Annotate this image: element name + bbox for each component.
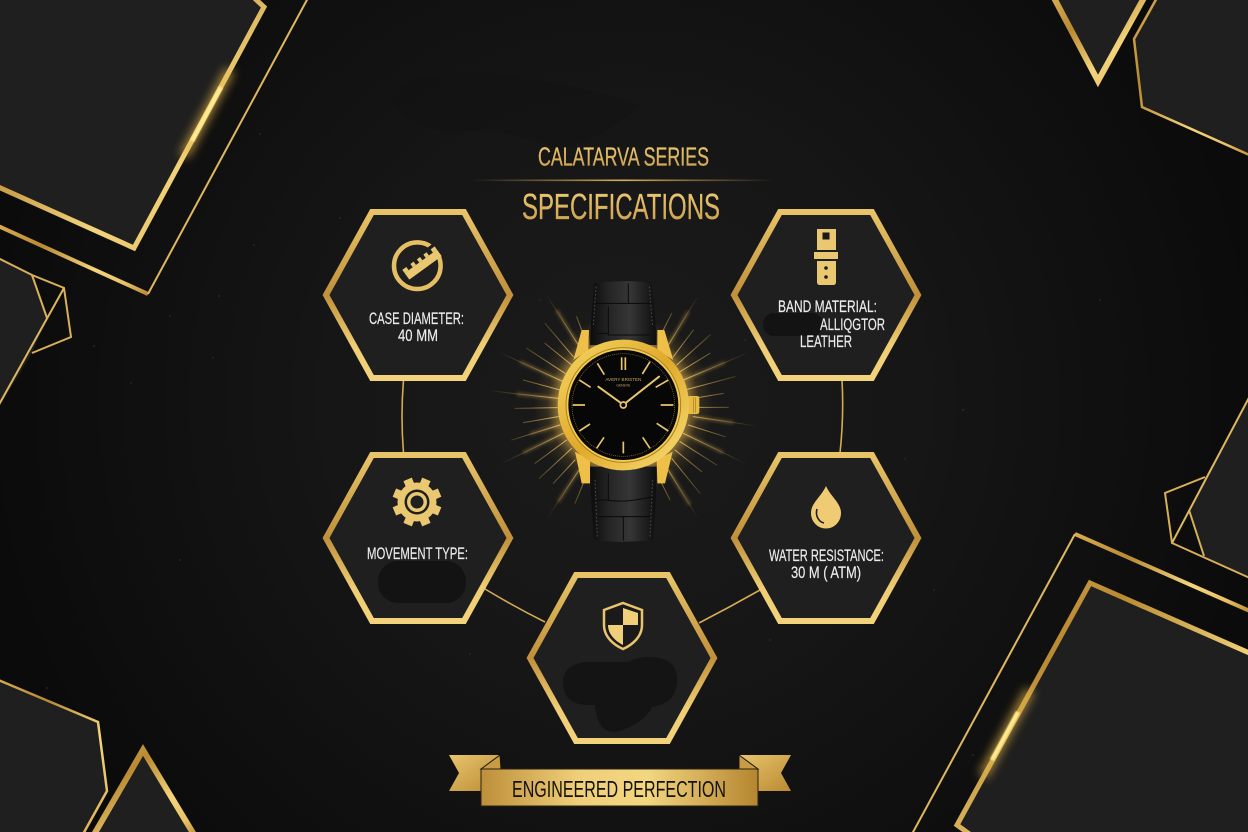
dial brand text: AVERY BRISTEN — [605, 377, 642, 383]
divider rule — [472, 180, 774, 181]
dial brand text: GENEVE — [616, 384, 631, 388]
sunburst ray glow — [517, 310, 733, 505]
panel: right small geometric frame — [1165, 392, 1248, 579]
dial brand text — [605, 377, 642, 388]
watch strap: bottom — [590, 467, 657, 542]
text: water resistance: 30 M ( ATM) — [791, 563, 861, 582]
watch crown — [687, 396, 699, 414]
icon: water drop — [811, 486, 841, 528]
ribbon banner — [449, 755, 791, 806]
text: water resistance: WATER RESISTANCE: — [769, 546, 884, 565]
text: band material: ALLIQGTOR — [820, 315, 885, 334]
icon: ruler in circle — [394, 242, 447, 289]
text: band material: LEATHER — [800, 332, 852, 351]
watch strap: top — [590, 281, 657, 345]
strap texture — [593, 283, 653, 541]
hexagon: warranty — [530, 575, 714, 741]
icon: watch strap buckle — [814, 229, 838, 285]
panel: left small geometric frame — [0, 257, 71, 412]
watch lugs — [573, 330, 673, 483]
ribbon folds — [481, 755, 501, 769]
icon: shield — [604, 603, 642, 649]
watch hands — [598, 377, 659, 403]
watch glow — [533, 315, 713, 495]
heading: series name: CALATARVA SERIES — [538, 142, 709, 172]
panel: top-right corner frame — [1053, 0, 1248, 157]
sunburst rays — [488, 295, 757, 522]
ribbon right tail — [739, 755, 791, 791]
panel: bottom-right corner frame — [912, 534, 1248, 832]
hour markers — [573, 357, 673, 453]
panel: top-left corner frame — [0, 0, 308, 294]
ribbon left tail — [449, 755, 501, 791]
text: case diameter — [369, 309, 464, 345]
connector lines — [402, 380, 843, 623]
text: water resistance — [769, 546, 884, 582]
redaction blob: movement type — [378, 561, 466, 603]
icon: gear — [393, 478, 441, 526]
background speckles — [46, 133, 1101, 756]
watch dial — [568, 350, 678, 460]
background smoke shape — [390, 72, 640, 150]
heading: specifications: SPECIFICATIONS — [522, 186, 720, 227]
redaction blob: warranty — [563, 657, 677, 732]
ribbon main band — [481, 769, 758, 806]
text: case diameter: CASE DIAMETER: — [369, 309, 464, 328]
central watch — [488, 281, 757, 542]
strap stitching — [593, 287, 653, 537]
text: band material — [778, 297, 885, 351]
hexagon: water resistance — [734, 455, 918, 621]
text: movement type: MOVEMENT TYPE: — [367, 544, 468, 563]
text: band material: BAND MATERIAL: — [778, 297, 877, 316]
hexagon: band material — [734, 212, 918, 378]
hexagon: case diameter — [326, 212, 510, 378]
panel: bottom-left corner frame — [0, 679, 196, 832]
hexagon: movement type — [326, 455, 510, 621]
watch case — [558, 340, 689, 470]
redaction blob: band material — [763, 313, 823, 336]
ribbon text: ENGINEERED PERFECTION — [512, 776, 726, 802]
text: case diameter: 40 MM — [398, 326, 438, 345]
